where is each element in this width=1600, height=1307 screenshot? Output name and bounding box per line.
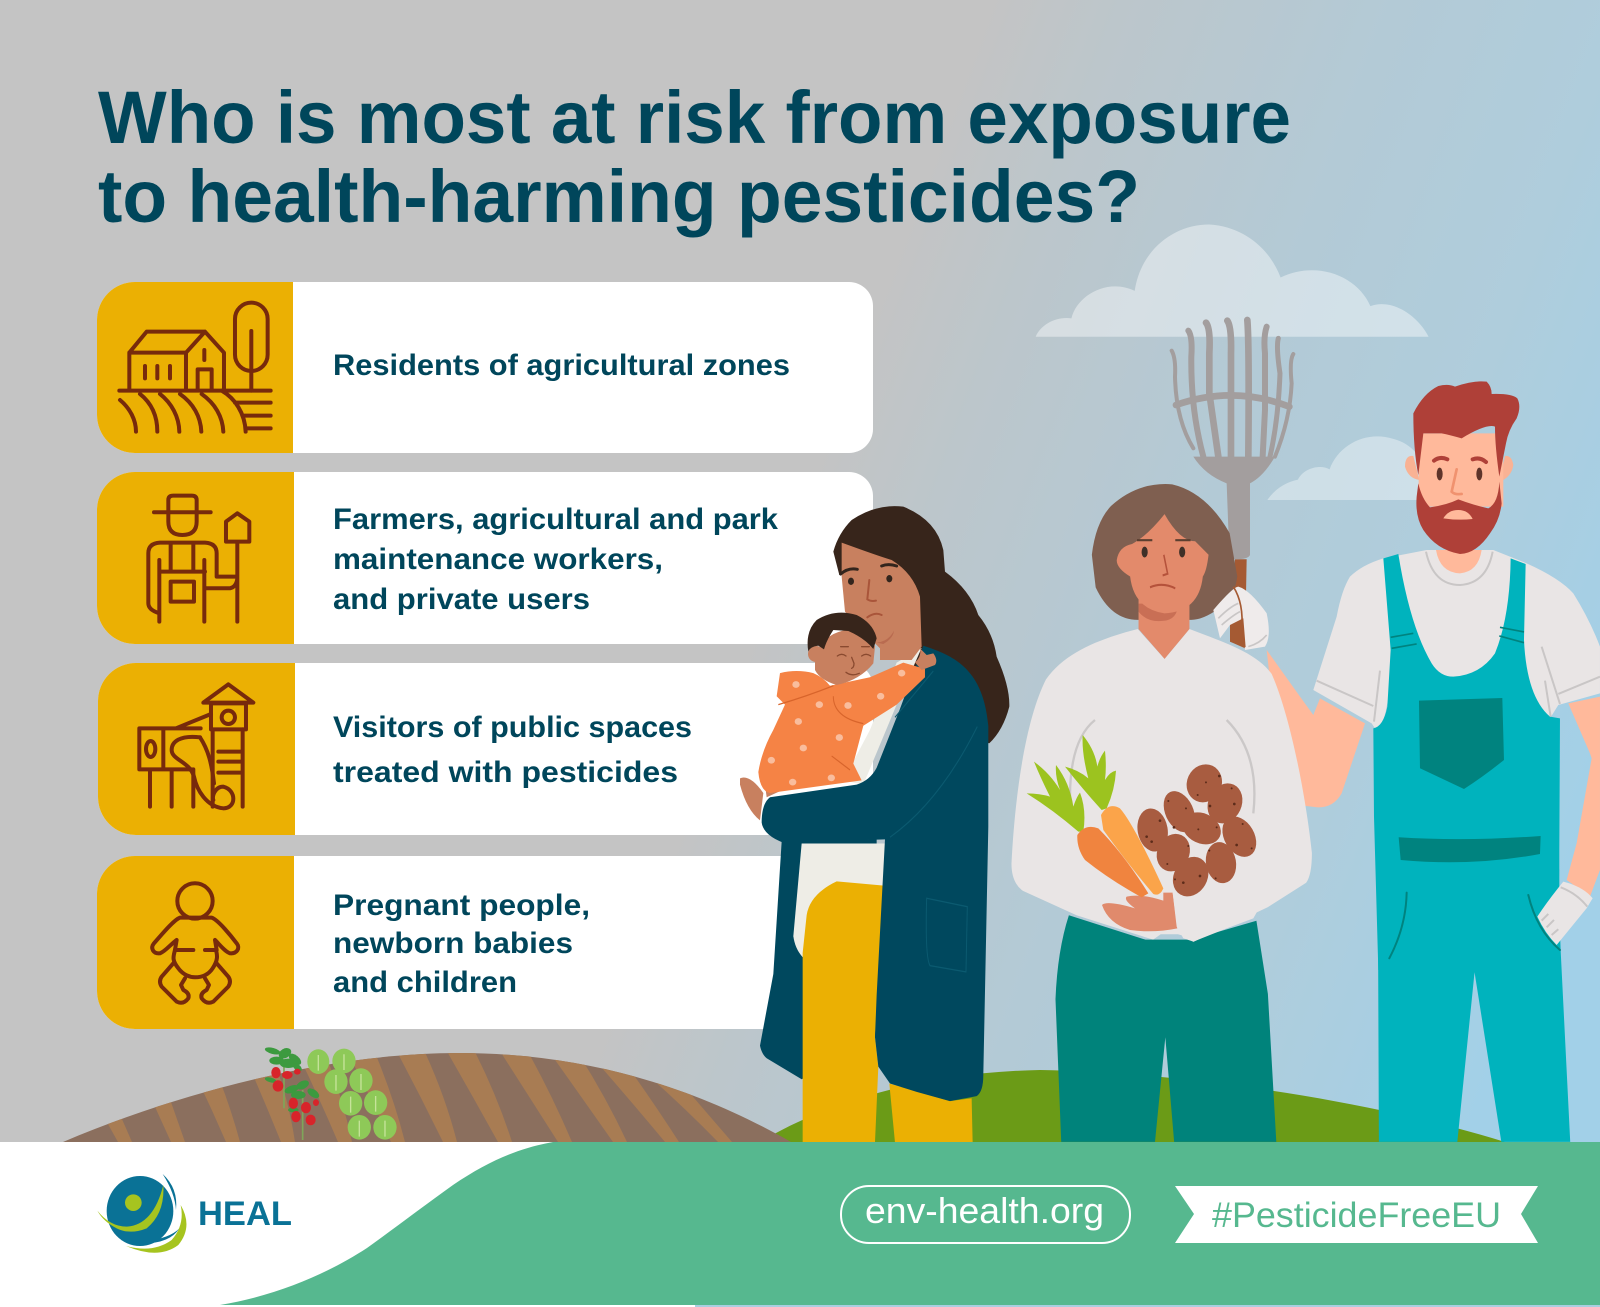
cloud: small xyxy=(1267,436,1429,500)
pitchfork xyxy=(1172,320,1293,648)
hashtag ribbon xyxy=(1175,1186,1538,1243)
cloud: large xyxy=(1036,224,1429,337)
website pill: env-health.org xyxy=(865,1190,1104,1231)
title xyxy=(98,76,1291,238)
figure: mother and baby xyxy=(740,506,1009,1142)
icon: baby xyxy=(152,883,238,1003)
text: visitors xyxy=(333,711,692,789)
logo: HEAL xyxy=(97,1174,292,1253)
text: farmers: and private users xyxy=(333,583,590,616)
footer band xyxy=(0,1142,1600,1307)
text: pregnant people xyxy=(333,889,590,999)
text: farmers xyxy=(333,503,778,616)
icon: playground xyxy=(139,684,253,808)
card: visitors of public spaces xyxy=(98,663,873,835)
vegetable plants xyxy=(264,1046,397,1140)
text: farmers: maintenance workers, xyxy=(333,543,663,576)
ploughed field xyxy=(60,1048,800,1145)
glove gripping pitchfork xyxy=(1213,587,1269,650)
card: residents of agricultural zones xyxy=(97,282,873,453)
text: residents: Residents of agricultural zones xyxy=(333,349,790,382)
card: farmers and workers xyxy=(97,472,873,644)
man's head xyxy=(1405,381,1519,554)
icon: farmer with shovel xyxy=(148,496,249,622)
text: pregnant people: newborn babies xyxy=(333,927,573,960)
figure: man in teal overalls xyxy=(1267,381,1600,1142)
mother hair xyxy=(833,506,1009,743)
text: pregnant people: Pregnant people, xyxy=(333,889,590,922)
carrots, potatoes and hand xyxy=(1027,720,1263,942)
pocket seams and glove xyxy=(1389,882,1593,958)
text: visitors: treated with pesticides xyxy=(333,756,678,789)
title: to health-harming pesticides? xyxy=(98,155,1140,238)
text: visitors: Visitors of public spaces xyxy=(333,711,692,744)
text: pregnant people: and children xyxy=(333,966,517,999)
lettuces xyxy=(307,1049,397,1140)
text: farmers: Farmers, agricultural and park xyxy=(333,503,778,536)
icon: farm house xyxy=(119,303,271,432)
mother clothes and baby body xyxy=(740,646,988,1142)
left arm, shirt and upper overalls xyxy=(1267,550,1600,970)
logo: HEAL: HEAL xyxy=(198,1195,292,1233)
card: pregnant people and children xyxy=(97,856,873,1029)
mother and baby faces xyxy=(808,543,936,685)
website pill xyxy=(841,1186,1130,1243)
figure: woman with vegetables xyxy=(1011,484,1312,1142)
title: Who is most at risk from exposure xyxy=(98,76,1291,159)
overall legs xyxy=(1376,869,1570,1142)
green hill xyxy=(760,1070,1505,1142)
woman body xyxy=(1011,484,1312,1142)
hashtag ribbon: #PesticideFreeEU xyxy=(1212,1196,1501,1235)
tomato plants xyxy=(264,1046,321,1140)
